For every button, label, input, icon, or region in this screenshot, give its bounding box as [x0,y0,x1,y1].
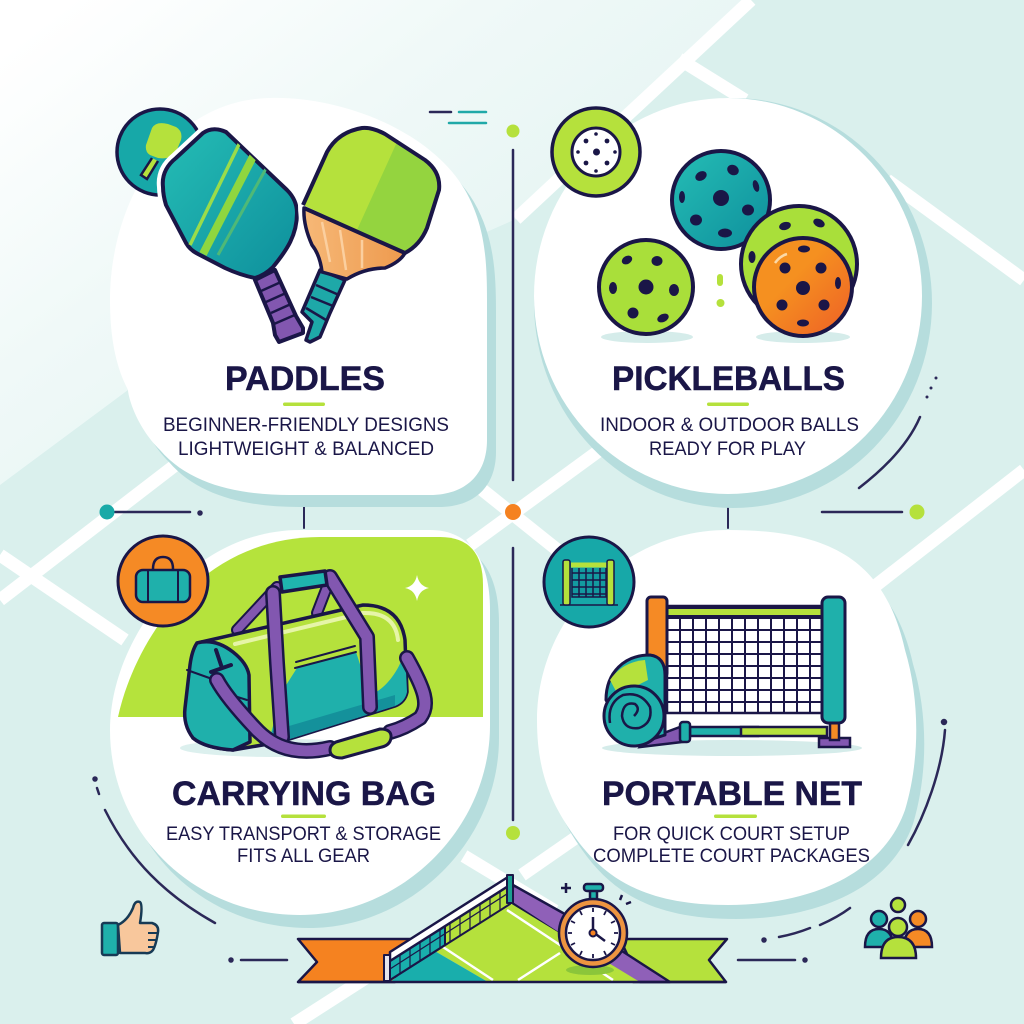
panel: portable net [537,530,924,919]
icon: ball shadows [601,331,850,343]
icon: teal paddle [163,129,303,342]
divider [281,814,326,818]
banner: ribbon with court [298,875,727,982]
icon: duffel bag [180,571,425,758]
icon: sparkle [405,575,429,601]
text block [163,415,449,460]
text block [600,415,859,460]
heading: PICKLEBALLS [612,360,845,398]
icon: ball badge [552,108,640,196]
divider [707,402,749,406]
node dots [100,124,924,840]
panel: pickleballs [534,98,932,508]
icon: ball dots [716,274,724,307]
icon: tennis net [384,875,513,981]
panel: paddles [110,98,496,507]
text block: READY FOR PLAY [649,439,806,460]
text block: COMPLETE COURT PACKAGES [593,846,870,867]
text block [593,824,870,867]
divider [283,402,325,406]
icon: net badge [544,537,634,627]
icon: ground shadow [602,740,862,756]
icon: lime ball [599,240,693,334]
decorative connectors and dots [94,112,946,962]
text block: BEGINNER-FRIENDLY DESIGNS [163,415,449,436]
icon: teal ball [672,151,770,249]
text block: LIGHTWEIGHT & BALANCED [178,439,434,460]
icon: back lime ball [741,206,857,322]
icon: rolled net [604,655,665,746]
icon: orange ball [754,238,852,336]
text block: FITS ALL GEAR [237,846,370,867]
text block: EASY TRANSPORT & STORAGE [166,824,441,845]
text block: FOR QUICK COURT SETUP [613,824,850,845]
icon: net mesh [640,597,850,747]
text block: INDOOR & OUTDOOR BALLS [600,415,859,436]
divider [714,814,757,818]
icon: lime paddle [302,128,439,342]
icon: stopwatch [559,883,631,975]
icon: paddle badge [117,109,203,195]
heading: CARRYING BAG [172,775,436,813]
text block [166,824,441,867]
heading: PADDLES [225,360,385,398]
heading: PORTABLE NET [602,775,862,813]
icon: thumbs up [102,902,158,955]
icon: bag badge [118,536,208,626]
icon: group of people [865,898,932,958]
panel: carrying bag [110,530,499,928]
